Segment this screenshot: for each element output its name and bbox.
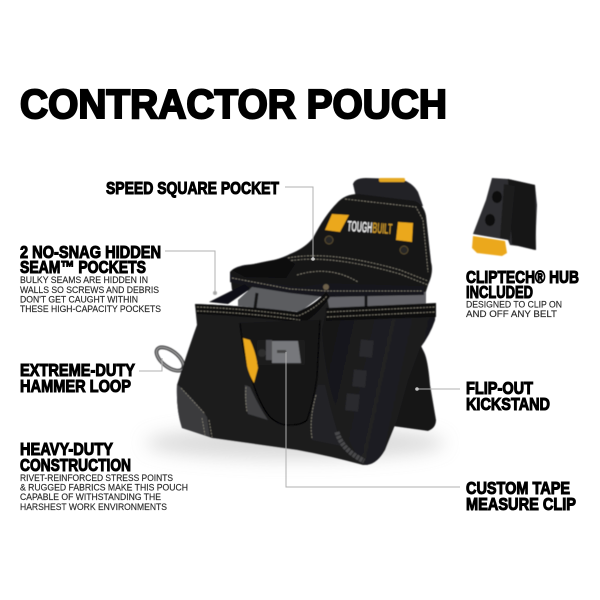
leader: speed square pocket — [285, 187, 313, 258]
callout: custom tape measure clip: CUSTOM TAPE — [466, 478, 570, 498]
hammer loop — [152, 343, 188, 375]
callout: heavy-duty construction: HEAVY-DUTY — [20, 439, 113, 459]
centre pocket — [240, 320, 320, 425]
callout: custom tape measure clip: MEASURE CLIP — [466, 494, 576, 514]
tape measure clip — [257, 340, 305, 365]
callout: hammer loop — [20, 360, 135, 396]
yellow clip tab — [472, 236, 507, 256]
title: CONTRACTOR POUCH — [20, 81, 447, 127]
callout: hammer loop: HAMMER LOOP — [20, 376, 131, 396]
callout: heavy-duty construction: CAPABLE OF WITHSTANDING THE — [20, 492, 161, 503]
callout: heavy-duty construction — [20, 439, 188, 513]
left lower corner patch — [177, 384, 212, 437]
callout: no-snag hidden seam pockets: BULKY SEAMS ARE HIDDEN IN — [20, 275, 148, 286]
callout: no-snag hidden seam pockets: WALLS SO SCREWS AND DEBRIS — [20, 285, 159, 296]
callout: cliptech hub: INCLUDED — [466, 282, 533, 302]
pouch product illustration — [145, 178, 445, 465]
callout: no-snag hidden seam pockets: SEAM™ POCKETS — [20, 257, 146, 277]
callout: cliptech hub: AND OFF ANY BELT — [466, 309, 557, 320]
yellow strap tabs and brand logo — [325, 214, 413, 254]
back panel with belt clip — [230, 178, 432, 298]
callout: flip-out kickstand — [466, 378, 550, 414]
yellow pull tag — [243, 338, 258, 383]
callout: flip-out kickstand: KICKSTAND — [466, 394, 550, 414]
callout: no-snag hidden seam pockets — [20, 242, 161, 315]
leader: hidden seam pockets — [165, 251, 215, 292]
callout: no-snag hidden seam pockets: THESE HIGH-CAPACITY POCKETS — [20, 304, 161, 315]
ground shadow — [145, 427, 445, 459]
callout: no-snag hidden seam pockets: 2 NO-SNAG HIDDEN — [20, 242, 161, 262]
callout: speed square pocket: SPEED SQUARE POCKET — [106, 178, 279, 198]
callout: no-snag hidden seam pockets: DON'T GET CAUGHT WITHIN — [20, 294, 138, 306]
pouch main body — [177, 292, 436, 465]
callout: heavy-duty construction: CONSTRUCTION — [20, 455, 131, 475]
front seam and braided edge — [311, 385, 364, 461]
callout: custom tape measure clip — [466, 478, 576, 514]
callout: flip-out kickstand: FLIP-OUT — [466, 378, 533, 398]
kickstand — [392, 340, 436, 431]
leader: kickstand — [417, 388, 460, 390]
cliptech hub icon — [472, 178, 537, 256]
leader end dots — [311, 257, 419, 391]
callout: heavy-duty construction: & RUGGED FABRICS MAKE THIS POUCH — [20, 482, 188, 494]
callout: cliptech hub — [466, 267, 579, 320]
leader: tape measure clip — [286, 352, 460, 487]
callout: heavy-duty construction: RIVET-REINFORCED STRESS POINTS — [20, 473, 173, 484]
callout: cliptech hub: DESIGNED TO CLIP ON — [466, 300, 562, 310]
leader: hammer loop — [139, 358, 162, 371]
side pocket webbing loops — [345, 339, 374, 412]
upper binding band — [209, 258, 424, 304]
yellow strap tabs and brand logo: TOUGHBUILT — [347, 218, 393, 238]
callout: hammer loop: EXTREME-DUTY — [20, 360, 135, 380]
callout: heavy-duty construction: HARSHEST WORK ENVIRONMENTS — [20, 502, 167, 513]
grey interior pockets — [238, 287, 426, 314]
